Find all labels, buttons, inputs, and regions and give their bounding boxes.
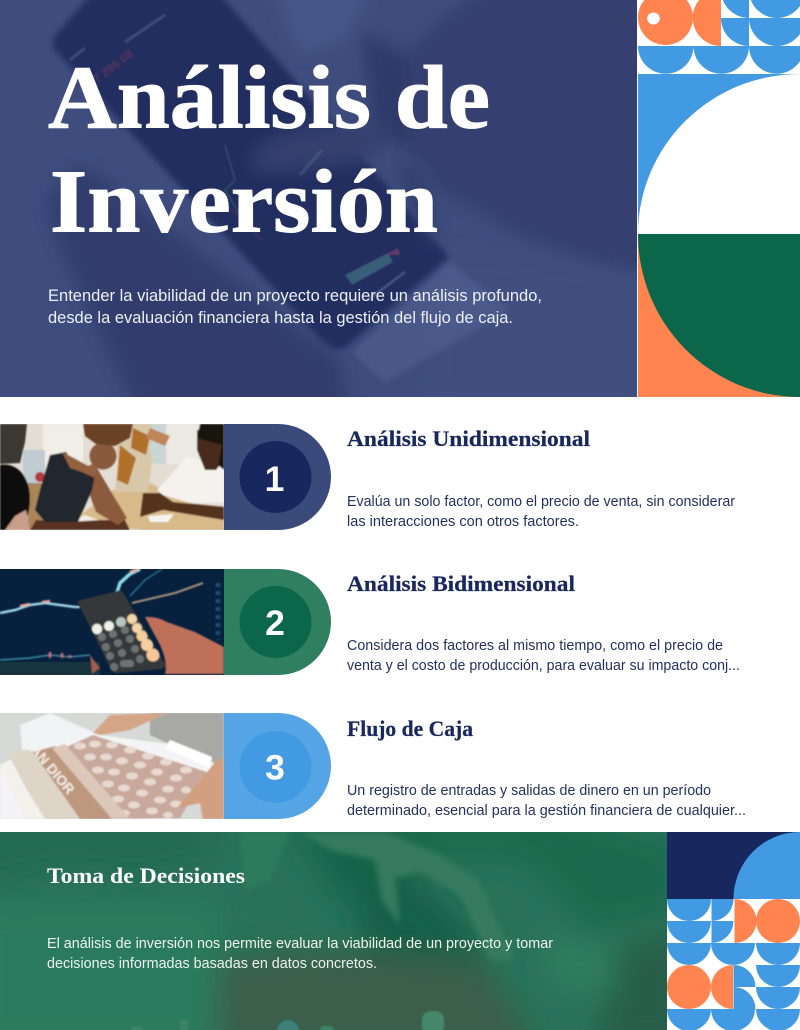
title <box>48 48 490 252</box>
subtitle: Entender la viabilidad de un proyecto requiere un análisis profundo, <box>48 287 542 305</box>
panel: footer geometric pattern <box>667 832 800 1030</box>
orange circles and half circles <box>667 899 800 1009</box>
photo: hands with patterned scarf <box>0 713 224 819</box>
step description: Un registro de entradas y salidas de dinero en un período <box>347 783 711 799</box>
step heading: Flujo de Caja <box>347 716 473 741</box>
panel: header <box>0 0 660 420</box>
panel: header geometric pattern <box>638 0 800 397</box>
orange circle with hole <box>638 0 693 45</box>
title: Inversión <box>50 152 438 252</box>
step description <box>347 494 735 530</box>
blue half circles and quarters <box>667 899 800 1030</box>
photo: hands with patterned scarf: AN DIOR <box>28 742 78 797</box>
step description: Considera dos factores al mismo tiempo, como el precio de <box>347 638 723 654</box>
phone <box>53 0 449 350</box>
panel: footer <box>0 832 667 1030</box>
photo: team working at a table <box>0 424 224 530</box>
photo: calculator over stock chart <box>0 569 224 675</box>
subtitle <box>48 287 542 327</box>
number pill: 2 <box>265 603 285 643</box>
title: Análisis de <box>48 48 490 148</box>
phone screen details <box>70 15 405 300</box>
header background photo: hands holding phone <box>0 0 660 420</box>
step description: Evalúa un solo factor, como el precio de venta, sin considerar <box>347 494 735 510</box>
footer heading: Toma de Decisiones <box>47 863 245 888</box>
step description: venta y el costo de producción, para evaluar su impacto conj... <box>347 658 740 674</box>
step 1 <box>0 424 735 530</box>
footer description <box>47 936 553 972</box>
blue half circles and quarters <box>638 0 800 74</box>
number pill: 1 <box>265 459 284 499</box>
number pill <box>224 424 331 530</box>
number pill <box>224 569 331 675</box>
step heading: Análisis Bidimensional <box>347 571 575 596</box>
green and orange block <box>638 234 800 397</box>
step description <box>347 638 740 674</box>
navy block with blue arc <box>667 832 800 899</box>
banknotes <box>356 266 504 380</box>
step description <box>347 783 746 819</box>
footer description: El análisis de inversión nos permite evaluar la viabilidad de un proyecto y tomar <box>47 936 553 952</box>
phone screen details: 57 296.08 <box>85 46 136 90</box>
step description: las interacciones con otros factores. <box>347 514 579 530</box>
footer background photo <box>0 832 667 1030</box>
step 3 <box>0 713 746 819</box>
subtitle: desde la evaluación financiera hasta la gestión del flujo de caja. <box>48 309 513 327</box>
step 2 <box>0 569 740 675</box>
footer description: decisiones informadas basadas en datos concretos. <box>47 956 377 972</box>
blue block with white arc <box>638 74 800 394</box>
step description: determinado, esencial para la gestión financiera de cualquier... <box>347 803 746 819</box>
number pill: 3 <box>265 748 285 788</box>
orange half circle <box>693 0 721 46</box>
number pill <box>224 713 331 819</box>
step heading: Análisis Unidimensional <box>347 426 590 451</box>
